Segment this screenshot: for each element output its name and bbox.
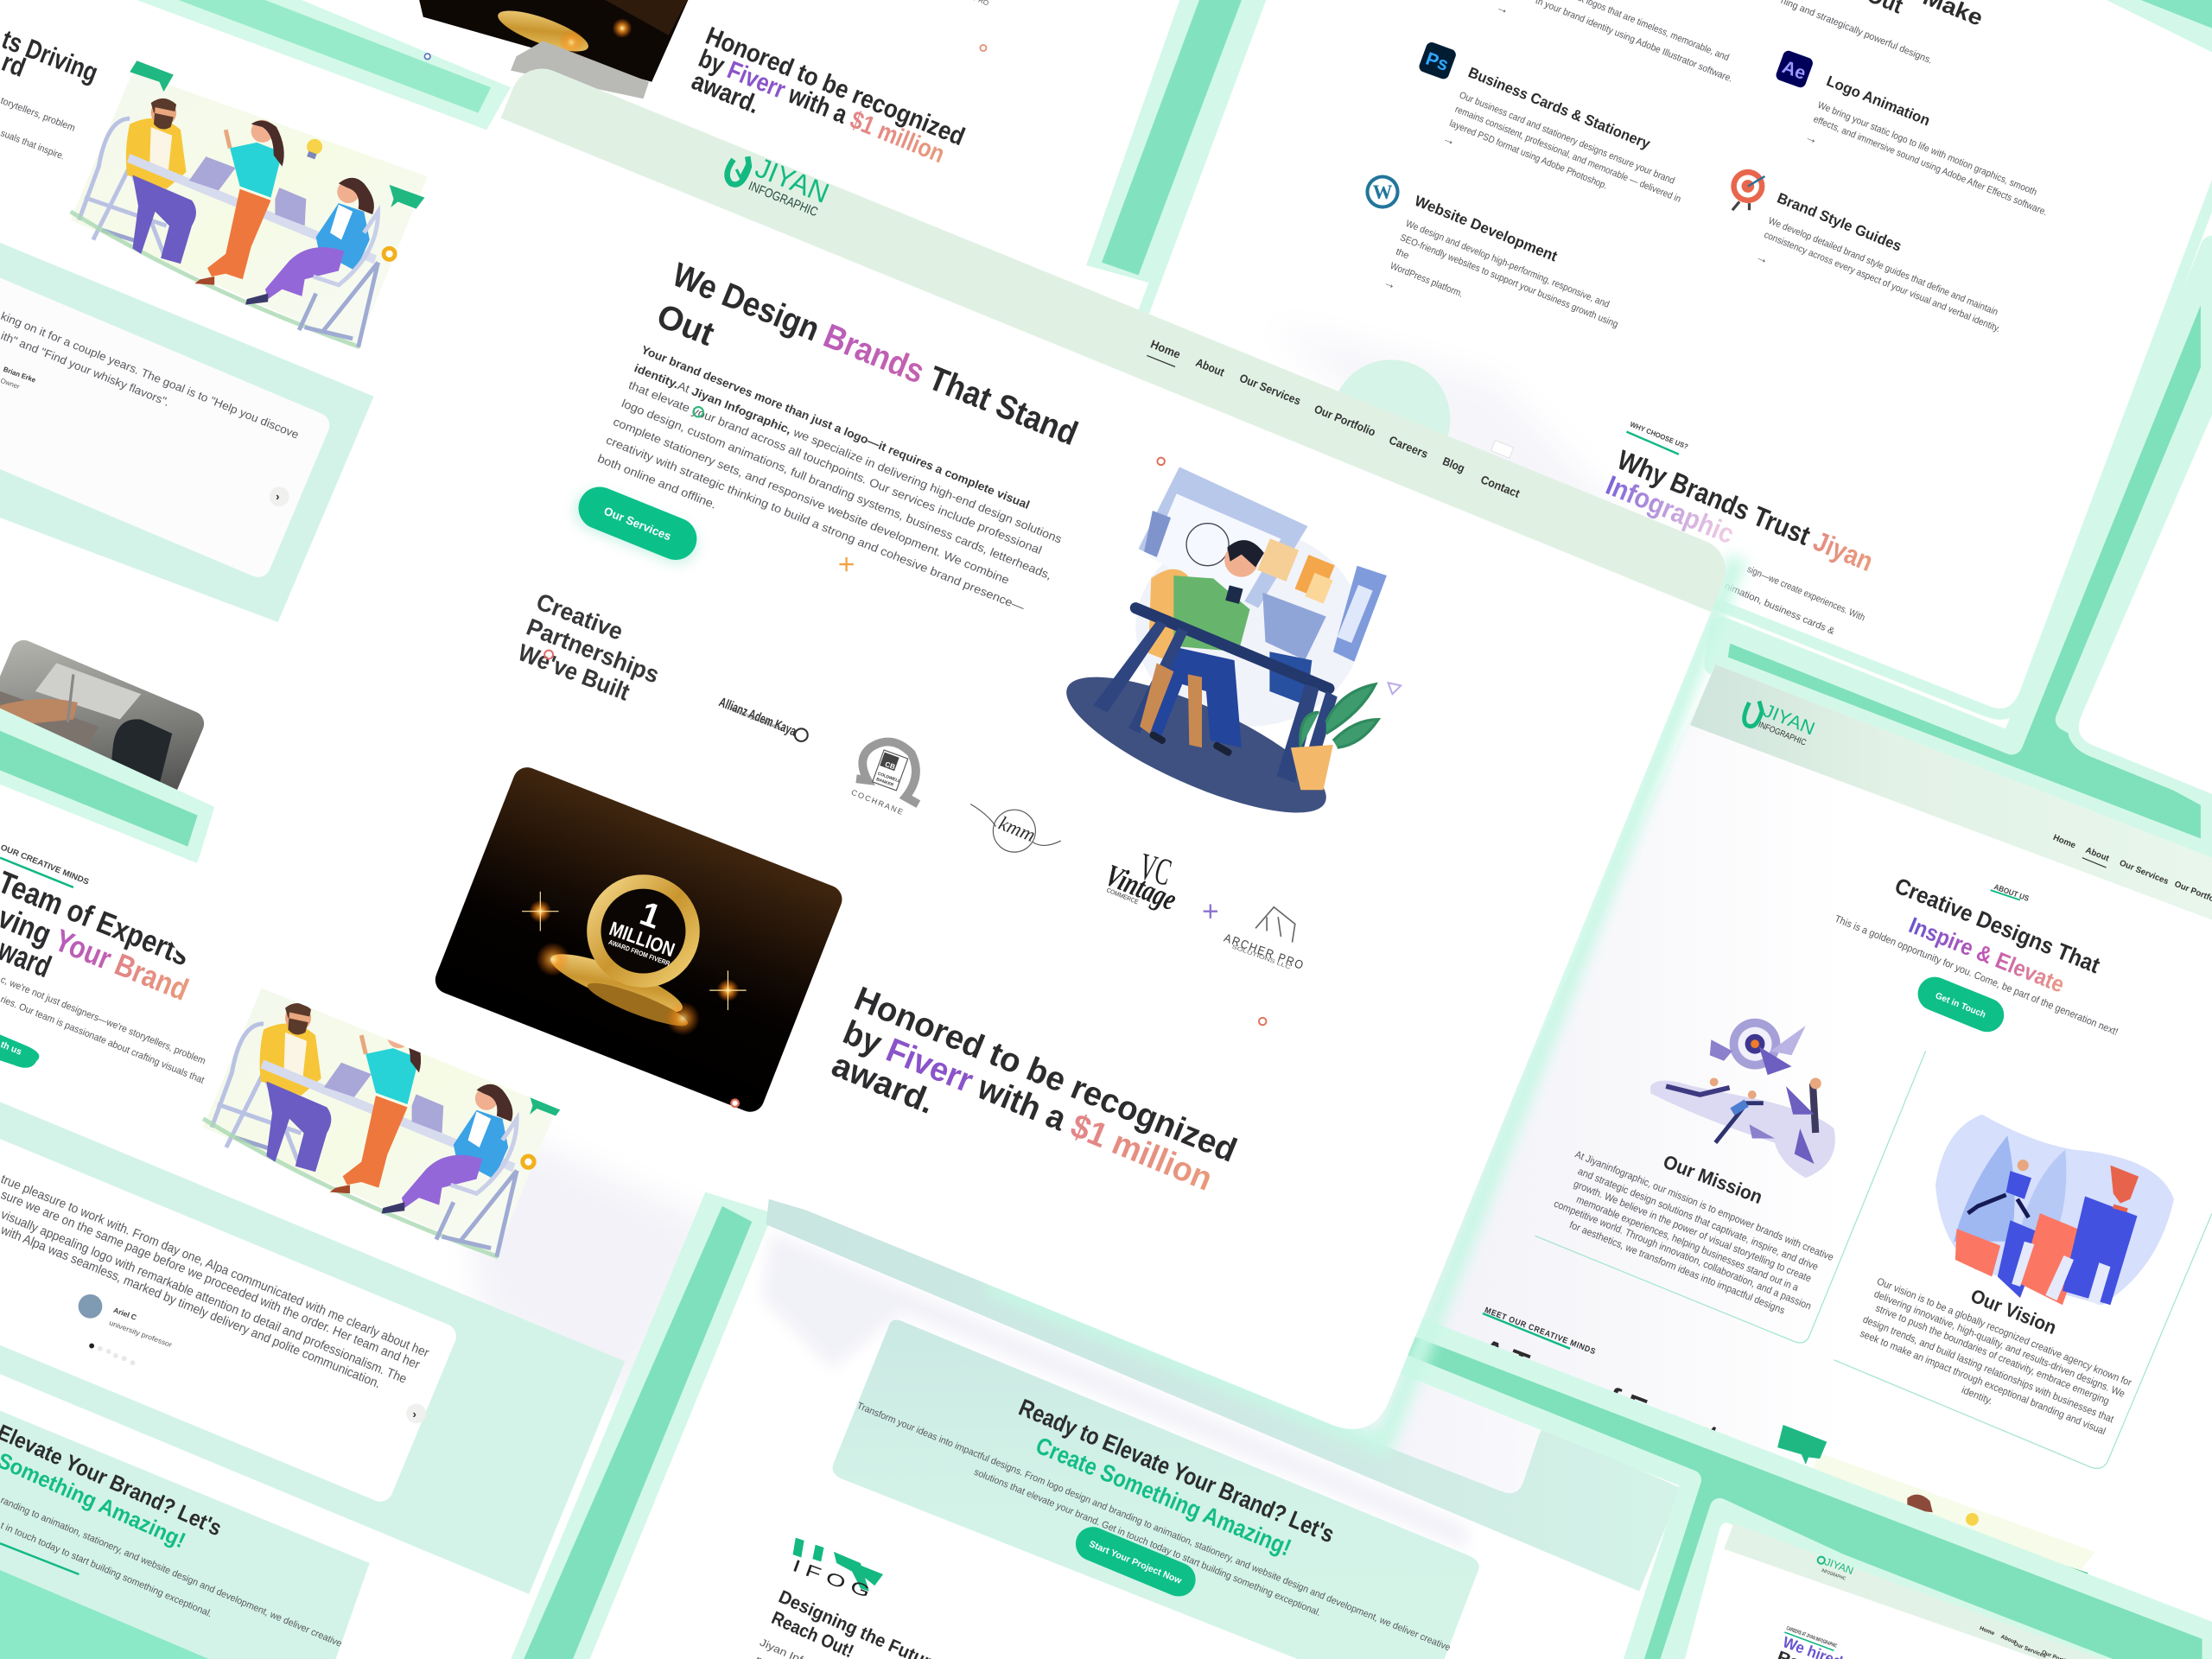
lavender card	[1357, 1383, 1541, 1493]
service: website development: →	[1382, 276, 1398, 293]
icon: After Effects	[1775, 49, 1815, 89]
navigation: main: Home	[1148, 338, 1182, 361]
testimonial band: Ariel C	[112, 1306, 137, 1322]
award heading: award.	[688, 67, 764, 119]
main panel glow on right and bottom edges	[988, 557, 1738, 1445]
heading: meet our creative minds: A Team of Experts	[1476, 1333, 1738, 1459]
heading: creative partnerships	[514, 588, 663, 706]
service: brand style guides: consistency across every aspect of your visual and verbal identity.	[1763, 230, 2002, 334]
card: our vision: seek to make an impact through exceptional branding and visual	[1859, 1328, 2107, 1437]
logo: kmm: kmm	[995, 812, 1039, 846]
service: business cards: layered PSD format using Adobe Photoshop.	[1448, 118, 1609, 191]
logo: Jiyan Infographic: INFOGRAPHIC	[747, 180, 820, 219]
section heading: c, we're not just designers—we're storytellers, problem	[0, 975, 207, 1067]
icon: WordPress: W	[1373, 181, 1393, 203]
service: logo animation: →	[1803, 130, 1820, 148]
navigation: main: Contact	[1479, 473, 1522, 500]
section: why choose us: Why Brands Trust Jiyan	[1613, 444, 1878, 577]
card: our mission: and strategic design solutions that captivate, inspire, and drive	[1576, 1166, 1820, 1273]
logo: about header: INFOGRAPHIC	[1757, 720, 1808, 748]
award heading: by Fiverr with a $1 million	[695, 44, 949, 168]
hero paragraph: identity.At Jiyan Infographic, we specialize in delivering high-end design solutions	[632, 361, 1064, 546]
bottom green strip	[0, 1570, 209, 1659]
testimonial band	[0, 243, 374, 622]
navigation: careers: About	[1999, 1634, 2018, 1646]
heading: creative partnerships: We've Built	[514, 639, 633, 706]
service: logo animation: Logo Animation	[1824, 72, 1933, 129]
icon: Photoshop	[1418, 41, 1458, 80]
testimonial band: true pleasure to work with. From day one, Alpa communicated with me clearly about her	[0, 1173, 431, 1360]
card: our vision: strive to push the boundaries of creativity, embrace emerging	[1874, 1302, 2111, 1407]
card: our vision	[1834, 1115, 2212, 1468]
logo: careers header: JIYAN	[1823, 1555, 1855, 1577]
section heading: OUR CREATIVE MINDS	[0, 842, 90, 887]
navigation: main: Blog	[1440, 454, 1466, 475]
card: our vision: identity.	[1960, 1384, 1994, 1407]
testimonial band: ›	[413, 1408, 416, 1421]
logo: about header: JIYAN	[1760, 701, 1817, 740]
card: our mission: At Jiyaninfographic, our mission is to empower brands with creative	[1573, 1149, 1835, 1263]
logo: VC Vintage: Vintage	[1101, 857, 1181, 917]
logo: careers header: INFOGRAPHIC	[1821, 1568, 1847, 1582]
section heading: ries. Our team is passionate about crafting visuals that	[0, 995, 207, 1086]
panel: left team section	[0, 842, 720, 1659]
logo: Allianz Adem Kaya: Allianz Adem Kaya	[717, 695, 798, 740]
award image: MILLION	[607, 917, 677, 961]
hero heading: Out	[652, 297, 719, 353]
decorative square	[1491, 440, 1514, 458]
heading: about: Creative Designs That	[1891, 873, 2104, 978]
button: our services	[570, 480, 704, 568]
service: brand style guides: We develop detailed brand style guides that define and maintain	[1767, 216, 1999, 318]
icon: WordPress	[1365, 175, 1400, 209]
service: website development: SEO-friendly websites to support your business growth using	[1398, 232, 1619, 330]
panel: bottom-right careers section	[1673, 1516, 2212, 1659]
navigation: careers: Our Services	[2012, 1641, 2047, 1659]
logo: VC Vintage: COMMERCE	[1105, 886, 1140, 906]
decorative dome	[1332, 359, 1450, 478]
icon: Photoshop: Ps	[1423, 49, 1451, 75]
card: our vision: Our Vision	[1967, 1285, 2060, 1338]
section heading: Team of Experts	[0, 864, 194, 973]
button: our services: Our Services	[602, 505, 673, 543]
testimonial band: visually appealing logo with remarkable attention to detail and professionalism. The	[0, 1208, 409, 1387]
call to action band	[0, 1411, 370, 1659]
panel: bottom center call to action section	[505, 1192, 1681, 1659]
navigation: careers	[1979, 1625, 2075, 1659]
panel: about section	[1396, 664, 2212, 1650]
section: why choose us: Infographic	[1602, 469, 1738, 550]
navigation: about: Our Services	[2118, 858, 2171, 887]
award image: AWARD FROM FIVERR	[607, 938, 671, 968]
hero paragraph: both online and offline.	[595, 452, 718, 512]
logo: VC Vintage	[1101, 845, 1181, 917]
hero heading: We Design Brands That Stand	[667, 257, 1083, 453]
hero paragraph	[595, 343, 1064, 614]
logo: Jiyan Infographic	[728, 151, 834, 219]
hero paragraph: complete stationery sets, and responsive website development. We combine	[611, 415, 1011, 587]
testimonial band: sure we are on the same page before we proceeded with the order. Her team and her	[0, 1188, 422, 1372]
service: brand style guides: →	[1754, 250, 1770, 268]
service: website development: WordPress platform.	[1389, 261, 1465, 300]
navigation: main: Our Services	[1237, 372, 1303, 408]
service: website development: the	[1395, 247, 1410, 261]
award heading: by Fiverr with a $1 million	[838, 1014, 1217, 1198]
heading: experts driving: ts Driving	[0, 24, 102, 88]
award heading: Honored to be recognized	[702, 22, 969, 151]
hero paragraph: that elevate your brand across all touchpoints. Our services include professional	[626, 378, 1044, 556]
service: business cards: Our business card and stationery designs ensure your brand	[1458, 90, 1676, 187]
call to action band: randing to animation, stationery, and website design and development, we deliver creative	[0, 1495, 343, 1649]
service: website development	[1382, 192, 1619, 330]
heading: about: Get in Touch	[1934, 991, 1987, 1020]
service: website development: Website Development	[1412, 192, 1560, 265]
decorations	[424, 0, 990, 60]
heading: about: ABOUT US	[1993, 882, 2031, 903]
navigation: main: Our Portfolio	[1313, 403, 1377, 439]
card: our vision: Our vision is to be a globally recognized creative agency known for	[1875, 1275, 2133, 1389]
navigation: about	[2051, 833, 2212, 908]
award heading: Honored to be recognized	[849, 980, 1242, 1170]
illustration: vision	[1936, 1115, 2174, 1305]
logo: about header	[1745, 701, 1817, 748]
card: our mission: memorable experiences, helping businesses stand out in a	[1575, 1194, 1801, 1294]
award heading: award.	[827, 1046, 940, 1122]
service: logo animation: effects, and immersive sound using Adobe After Effects software.	[1812, 114, 2049, 218]
heading: about: This is a golden opportunity for you. Come, be part of the generation next!	[1833, 913, 2120, 1038]
testimonial band: with Alpa was seamless, marked by timely delivery and polite communication.	[0, 1223, 383, 1391]
logo: Archer Pro: SOLUTIONS LLC	[1231, 944, 1292, 971]
call to action band: t in touch today to start building something exceptional.	[0, 1521, 213, 1619]
award photo clipped	[417, 0, 691, 99]
service: logo animation: We bring your static logo to life with motion graphics, smooth	[1816, 100, 2038, 198]
panel: top-left team section	[0, 0, 511, 863]
heading: careers	[1775, 1625, 1845, 1659]
award image	[431, 763, 846, 1116]
decorative shapes	[544, 407, 1401, 1107]
navigation: careers: Home	[1979, 1625, 1996, 1637]
testimonial band: university professor	[108, 1319, 174, 1349]
logo: Archer Pro: ARCHER PRO	[1222, 931, 1306, 972]
service: business cards: Business Cards & Stationery	[1465, 63, 1653, 152]
illustration: mission	[1650, 1019, 1835, 1178]
call to action card: Transform your ideas into impactful designs. From logo design and branding to animation, stationery, and website design and development, we deliver creative	[855, 1401, 1452, 1653]
small decorations	[268, 972, 443, 1039]
service: logo animation	[1803, 72, 2049, 218]
logo: Coldwell Banker Cochrane: BANKER	[875, 777, 894, 788]
icon: target	[1731, 169, 1764, 210]
logo: kmm	[970, 804, 1061, 852]
logo: Coldwell Banker Cochrane: COCHRANE	[850, 788, 906, 817]
testimonial band	[0, 1102, 625, 1594]
panel: main homepage hero	[162, 60, 1735, 1441]
service: business cards: remains consistent, professional, and memorable — delivered in	[1453, 105, 1682, 205]
button: start your project: Start Your Project Now	[1088, 1539, 1184, 1586]
hero paragraph: Your brand deserves more than just a logo—it requires a complete visual	[639, 343, 1032, 512]
call to action card: solutions that elevate your brand. Get in touch today to start building something exceptional.	[972, 1467, 1322, 1618]
illustration: team at desk	[203, 965, 567, 1257]
card: our mission	[1535, 1019, 1926, 1343]
call to action card: Ready to Elevate Your Brand? Let's	[1015, 1394, 1338, 1548]
card: our mission: for aesthetics, we transform ideas into impactful designs	[1567, 1219, 1787, 1317]
service: logo design: →	[1494, 0, 1511, 18]
heading: creative partnerships: Creative	[533, 588, 626, 645]
service: business cards	[1440, 63, 1682, 205]
navigation: about: Home	[2051, 833, 2077, 851]
card: our mission: competitive world. Through innovation, collaboration, and a passion	[1552, 1198, 1813, 1313]
heading: creative partnerships: Partnerships	[523, 613, 663, 689]
mint band	[766, 1199, 1681, 1592]
heading: experts driving: suals that inspire.	[0, 128, 66, 162]
neighbouring panel corner	[2073, 378, 2212, 804]
card: our vision: design trends, and build lasting relationships with businesses that	[1861, 1314, 2116, 1426]
call to action band: Elevate Your Brand? Let's	[0, 1421, 226, 1541]
logo: Jiyan Infographic: JIYAN	[751, 151, 834, 209]
section: why choose us: nimation, business cards &	[1723, 582, 1836, 637]
navigation: main	[1147, 338, 1522, 500]
photo: hand sketching logo	[0, 639, 204, 790]
panel: top center award section	[417, 0, 1258, 285]
section: why choose us	[1602, 421, 1878, 637]
footer logo: IFOG	[790, 1556, 879, 1604]
service: brand style guides	[1754, 189, 2002, 334]
illustration: designer at desk	[1052, 467, 1387, 838]
heading: meet our creative minds: MEET OUR CREATIVE MINDS	[1483, 1306, 1597, 1357]
logo: Allianz Adem Kaya	[717, 695, 808, 741]
button: start your project	[1075, 1527, 1196, 1597]
footer logo	[790, 1538, 883, 1604]
hero paragraph: creativity with strategic thinking to build a strong and cohesive brand presence—	[604, 434, 1027, 614]
logo: Allianz Adem Kaya: Versicherungen und Finanzen	[728, 706, 784, 733]
testimonial band: king on it for a couple years. The goal is to "Help you discove	[0, 309, 301, 442]
heading: experts driving	[0, 31, 97, 159]
card: our vision: delivering innovative, high-quality, and results-driven designs. We	[1872, 1288, 2126, 1400]
logo: Archer Pro	[1222, 907, 1306, 972]
heading: experts driving: torytellers, problem	[0, 96, 77, 134]
lavender fade above call to action	[762, 1233, 1467, 1549]
logo: Coldwell Banker Cochrane	[850, 742, 918, 817]
testimonial band: Brian Erke	[3, 365, 37, 385]
header band	[477, 60, 1735, 671]
card: our mission: Our Mission	[1660, 1151, 1765, 1208]
testimonial band: ith" and "Find your whisky flavors".	[0, 329, 171, 409]
page body	[162, 118, 1711, 1441]
testimonial band: ›	[276, 490, 280, 503]
hero paragraph: logo design, custom animations, full branding systems, business cards, letterheads,	[620, 397, 1053, 582]
section heading	[0, 842, 207, 1086]
testimonial band: Owner	[0, 377, 21, 391]
navigation: about: About	[2084, 846, 2111, 864]
logo: Coldwell Banker Cochrane: COLDWELL	[877, 772, 901, 785]
service: website development: We design and develop high-performing, responsive, and	[1404, 219, 1611, 310]
illustration fragment: team	[1777, 1425, 2094, 1588]
icon: After Effects: Ae	[1779, 57, 1808, 84]
green junction strips top right	[1715, 0, 2212, 855]
logo: Coldwell Banker Cochrane: CB	[884, 760, 896, 771]
award image: 1	[635, 895, 665, 937]
second green strip	[0, 709, 214, 863]
logo: VC Vintage: VC	[1135, 845, 1176, 893]
section: why choose us: WHY CHOOSE US?	[1629, 421, 1689, 451]
navigation: main: Careers	[1387, 434, 1430, 461]
call to action card: Create Something Amazing!	[1032, 1432, 1295, 1561]
heading: about	[1833, 873, 2120, 1038]
service: brand style guides: Brand Style Guides	[1775, 189, 1904, 255]
section: why choose us: sign—we create experiences. With	[1745, 564, 1866, 623]
heading: about: Inspire & Elevate	[1905, 912, 2068, 998]
panel: top-right services section	[1128, 0, 2212, 714]
illustration: team at desk	[71, 60, 428, 347]
navigation: main: About	[1194, 356, 1227, 379]
service: business cards: →	[1440, 131, 1458, 149]
green strips bottom right	[1396, 1319, 2212, 1659]
card: our mission: growth. We believe in the power of visual storytelling to create	[1572, 1179, 1814, 1285]
logo: careers header	[1818, 1555, 1855, 1582]
